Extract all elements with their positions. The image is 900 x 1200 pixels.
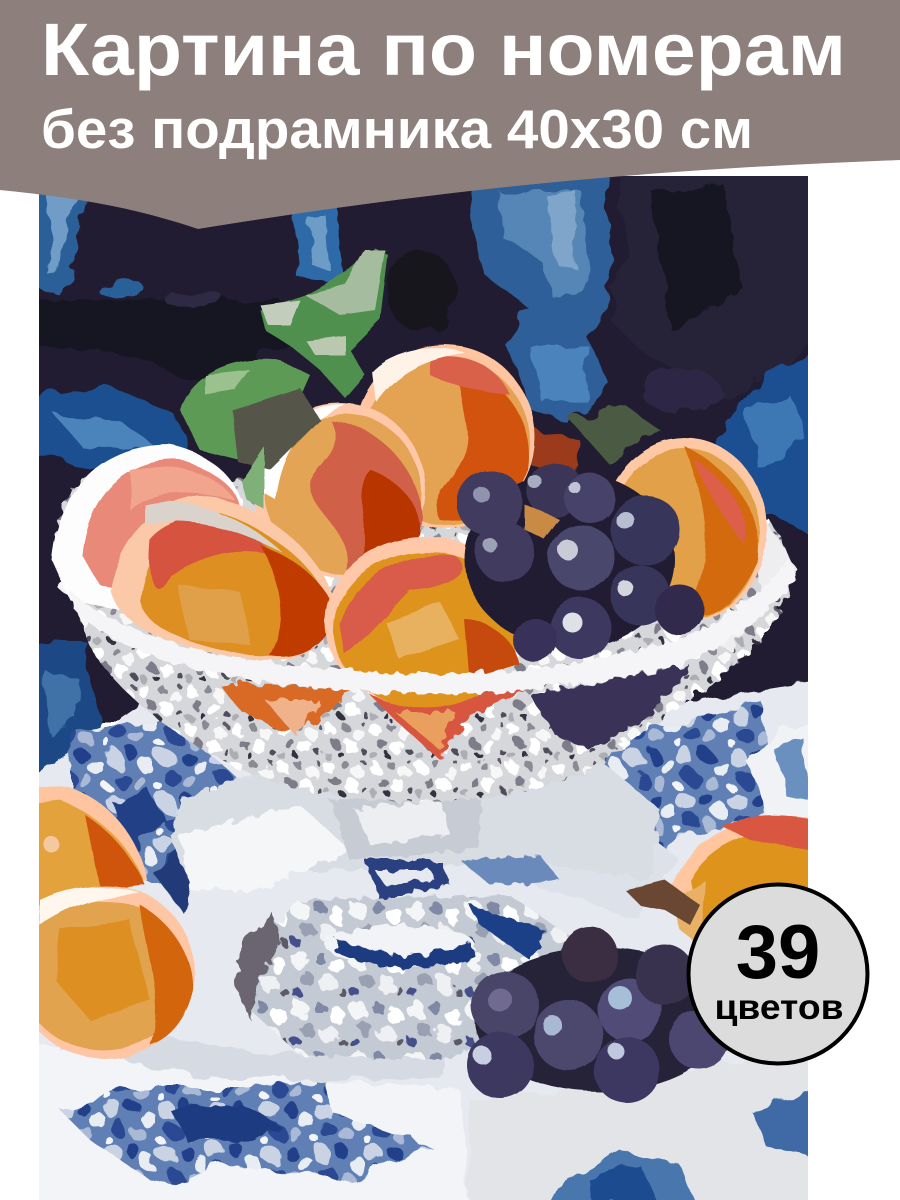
peach: front left [110,496,335,661]
lower left peaches [15,788,815,1059]
crystal bowl [55,470,798,802]
peaches in bowl [52,345,767,708]
badge number: 39 [736,910,820,995]
painting: fruit bowl still life [15,160,830,1200]
top banner [0,0,900,229]
peach: right [603,438,767,622]
bowl front rim [70,560,796,693]
peach: front centre [325,537,523,708]
title: Картина по номерам [41,8,846,91]
peach: lower left lower [15,885,195,1059]
green leaves [180,248,388,510]
peach: back centre [355,345,535,529]
lower tablecloth [20,680,830,1200]
lower grape cluster [467,880,730,1103]
peach: lower left upper [39,786,147,910]
badge: 39 colours [688,884,868,1064]
glass pedestal [170,760,660,1060]
grape cluster in bowl [457,462,705,662]
badge label: цветов [714,988,844,1027]
peach: middle [254,403,426,577]
peach: left back [52,445,245,610]
subtitle: без подрамника 40х30 см [41,98,753,160]
peach: lower right [670,816,815,960]
painting background: dark drapery [39,176,808,773]
